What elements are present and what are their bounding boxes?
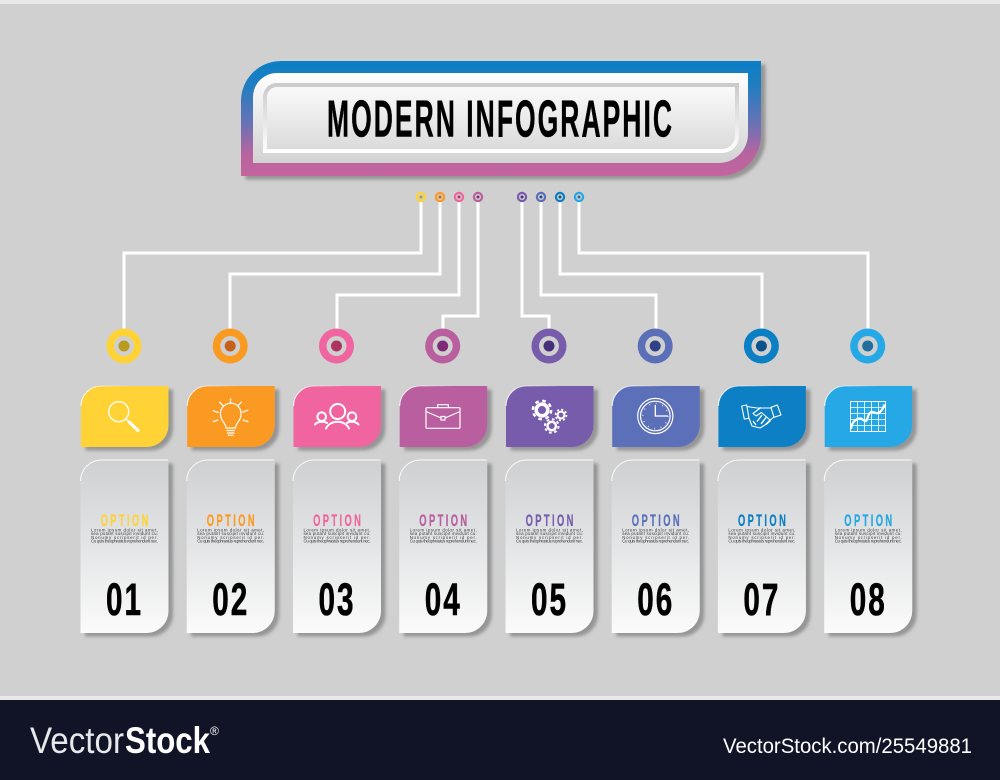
pin 06 bbox=[638, 328, 673, 364]
body text 06: Lorem ipsum dolor sit amet, bbox=[622, 528, 689, 532]
body text 03: Nonumy scripserit id per. bbox=[304, 535, 370, 540]
body text 03: sea putant suscipit invidunt cu. bbox=[304, 531, 370, 536]
option 06 column bbox=[612, 328, 700, 633]
body text 05: Lorem ipsum dolor sit amet, bbox=[516, 528, 583, 532]
body text 02 bbox=[197, 528, 264, 544]
icon tab 03 bbox=[294, 386, 381, 447]
number 08: 08 bbox=[850, 575, 887, 626]
pin 01 bbox=[106, 328, 142, 364]
footer logo bbox=[30, 720, 219, 761]
option label 01: OPTION bbox=[101, 511, 148, 530]
number 01: 01 bbox=[106, 575, 143, 626]
body text 02: Lorem ipsum dolor sit amet, bbox=[197, 528, 264, 532]
body text 02: Cu quis theophrastus reprehendunt nec. bbox=[197, 538, 264, 544]
card 02 bbox=[187, 460, 275, 633]
option label 08: OPTION bbox=[844, 511, 892, 530]
option label 03: OPTION bbox=[313, 511, 361, 530]
icon: gears bbox=[533, 401, 566, 433]
body text 04: Lorem ipsum dolor sit amet, bbox=[410, 528, 477, 532]
option label 06: OPTION bbox=[632, 511, 680, 530]
body text 08: Cu quis theophrastus reprehendunt nec. bbox=[835, 538, 902, 544]
pin 03 bbox=[319, 328, 354, 364]
icon: line chart bbox=[850, 402, 886, 432]
number 04: 04 bbox=[425, 575, 462, 626]
number 05: 05 bbox=[531, 575, 568, 626]
icon tab 07 bbox=[718, 386, 806, 447]
body text 08: sea putant suscipit invidunt cu. bbox=[835, 531, 902, 536]
pin 04 bbox=[425, 328, 460, 364]
option 04 column bbox=[399, 328, 487, 633]
icon: briefcase bbox=[426, 405, 460, 428]
card 08 bbox=[824, 460, 912, 633]
card 01 bbox=[80, 460, 168, 633]
icon: clock bbox=[638, 398, 673, 434]
footer logo: Vector bbox=[30, 720, 124, 761]
body text 03: Cu quis theophrastus reprehendunt nec. bbox=[304, 538, 370, 544]
body text 06: Nonumy scripserit id per. bbox=[622, 535, 689, 540]
title: MODERN INFOGRAPHIC bbox=[327, 90, 674, 148]
body text 05 bbox=[516, 528, 583, 544]
small connector dots bbox=[416, 192, 584, 202]
card 03 bbox=[293, 460, 381, 633]
card 04 bbox=[399, 460, 487, 633]
body text 07: Cu quis theophrastus reprehendunt nec. bbox=[728, 538, 795, 544]
number 07: 07 bbox=[743, 575, 780, 626]
icon tab 05 bbox=[506, 386, 594, 447]
body text 04: sea putant suscipit invidunt cu. bbox=[410, 531, 477, 536]
body text 02: Nonumy scripserit id per. bbox=[197, 535, 264, 540]
icon: light bulb bbox=[213, 398, 248, 435]
body text 07: Lorem ipsum dolor sit amet, bbox=[728, 528, 795, 532]
pin 07 bbox=[744, 328, 779, 364]
pin 05 bbox=[532, 328, 566, 364]
number 06: 06 bbox=[637, 575, 674, 626]
footer bar bbox=[0, 696, 1000, 780]
body text 05: sea putant suscipit invidunt cu. bbox=[516, 531, 583, 536]
body text 05: Nonumy scripserit id per. bbox=[516, 535, 583, 540]
card 06 bbox=[612, 460, 700, 633]
body text 06: sea putant suscipit invidunt cu. bbox=[622, 531, 689, 536]
body text 05: Cu quis theophrastus reprehendunt nec. bbox=[516, 538, 583, 544]
body text 04: Cu quis theophrastus reprehendunt nec. bbox=[410, 538, 477, 544]
title banner bbox=[241, 61, 761, 176]
body text 01 bbox=[91, 528, 158, 544]
footer logo: ® bbox=[210, 724, 219, 738]
option 01 column bbox=[80, 328, 168, 633]
connector lines bbox=[124, 197, 868, 346]
body text 04 bbox=[410, 528, 477, 544]
body text 06: Cu quis theophrastus reprehendunt nec. bbox=[622, 538, 689, 544]
number 02: 02 bbox=[212, 575, 249, 626]
option label 07: OPTION bbox=[738, 511, 786, 530]
option 02 column bbox=[187, 328, 275, 633]
option 03 column bbox=[293, 328, 381, 633]
icon tab 02 bbox=[187, 386, 275, 447]
body text 07: Nonumy scripserit id per. bbox=[728, 535, 795, 540]
pin 08 bbox=[850, 328, 885, 364]
icon tab 04 bbox=[400, 386, 487, 447]
card 07 bbox=[718, 460, 806, 633]
icon: handshake bbox=[742, 405, 781, 428]
option 08 column bbox=[824, 328, 912, 633]
icon tab 06 bbox=[612, 386, 700, 447]
body text 03 bbox=[304, 528, 370, 544]
option 07 column bbox=[718, 328, 806, 633]
body text 01: Cu quis theophrastus reprehendunt nec. bbox=[91, 538, 158, 544]
icon: people bbox=[315, 404, 358, 428]
body text 08: Lorem ipsum dolor sit amet, bbox=[835, 528, 902, 532]
footer image id: VectorStock.com/25549881 bbox=[723, 735, 972, 758]
card 05 bbox=[506, 460, 594, 633]
body text 01: Nonumy scripserit id per. bbox=[91, 535, 158, 540]
icon tab 01 bbox=[81, 386, 168, 447]
option label 05: OPTION bbox=[526, 511, 573, 530]
body text 04: Nonumy scripserit id per. bbox=[410, 535, 477, 540]
body text 03: Lorem ipsum dolor sit amet, bbox=[304, 528, 370, 532]
body text 07: sea putant suscipit invidunt cu. bbox=[728, 531, 795, 536]
body text 07 bbox=[728, 528, 795, 544]
body text 01: sea putant suscipit invidunt cu. bbox=[91, 531, 158, 536]
number 03: 03 bbox=[319, 575, 355, 626]
icon tab 08 bbox=[825, 386, 912, 447]
body text 02: sea putant suscipit invidunt cu. bbox=[197, 531, 264, 536]
icon: magnifier bbox=[109, 402, 138, 430]
body text 06 bbox=[622, 528, 689, 544]
option 05 column bbox=[506, 328, 594, 633]
pin 02 bbox=[213, 328, 248, 364]
body text 08: Nonumy scripserit id per. bbox=[835, 535, 902, 540]
option label 02: OPTION bbox=[207, 511, 255, 530]
body text 08 bbox=[835, 528, 902, 544]
footer logo: Stock bbox=[125, 720, 210, 761]
body text 01: Lorem ipsum dolor sit amet, bbox=[91, 528, 158, 532]
option label 04: OPTION bbox=[419, 511, 467, 530]
